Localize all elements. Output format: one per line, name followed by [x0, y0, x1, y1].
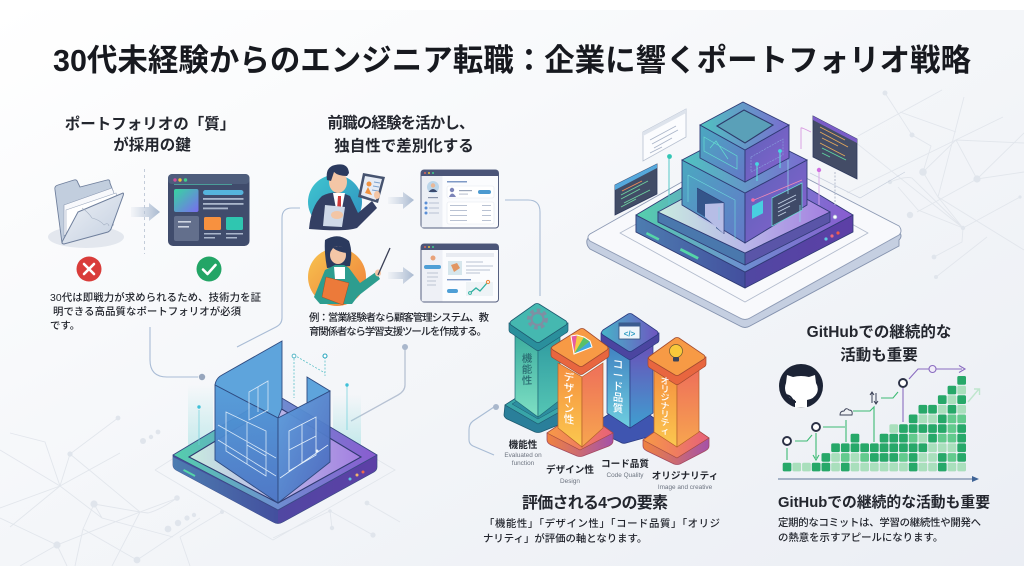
pillar: originality: リ [661, 408, 669, 420]
text: quality description [50, 291, 262, 332]
pillar labels: コード品質 [601, 458, 649, 470]
top cube [700, 125, 745, 182]
pillar labels: 機能性 [509, 439, 538, 451]
pillar: originality: テ [661, 417, 669, 429]
connectors with nodes [668, 157, 670, 205]
pillar: functionality [504, 304, 572, 432]
pillar labels: デザイン性 [546, 464, 594, 476]
heading: prior experience [328, 113, 474, 155]
pillar labels: Evaluated on [504, 452, 542, 459]
heading: prior experience: 独自性で差別化する [334, 136, 474, 155]
panel: GitHub activity [778, 323, 990, 544]
illustration: salesperson [308, 164, 385, 230]
panel: prior experience [308, 113, 498, 338]
panel: portfolio quality [48, 115, 262, 332]
pillar: originality: リ [661, 383, 669, 395]
base tier [636, 215, 853, 288]
floating code panel right [813, 116, 857, 179]
pillar: code quality: 品 [613, 391, 623, 405]
pillar: code quality: 質 [613, 401, 624, 416]
connectors: commit timeline [787, 366, 980, 460]
pillar: originality: ナ [661, 400, 669, 412]
pillar: code quality [597, 314, 659, 443]
pillar: design: ザ [564, 381, 575, 396]
text: quality description: です。 [50, 320, 80, 332]
text: example [309, 311, 490, 338]
title: 30代未経験からのエンジニア転職：企業に響くポートフォリオ戦略 [53, 43, 971, 78]
text: four elements description: ナリティ」が評価の軸となります。 [483, 532, 647, 545]
icon: code window: </> [624, 330, 636, 338]
text: example: 育関係者なら学習支援ツールを作成する。 [309, 325, 487, 338]
pillar: code quality: ー [613, 369, 623, 383]
pillar: code quality: ド [613, 380, 623, 394]
floating white panel [643, 109, 686, 161]
text: four elements description [483, 517, 720, 545]
icon: polished dashboard [168, 174, 250, 246]
text: GitHub description: 定期的なコミットは、学習の継続性や開発へ [778, 516, 981, 529]
pillar: originality: ィ [661, 425, 669, 437]
panel: four evaluation elements [483, 304, 720, 545]
illustration: blueprint on platform [173, 341, 377, 524]
pillar: code quality: コ [613, 358, 623, 372]
connector lines between sections [150, 200, 540, 455]
divider dashed line [144, 169, 146, 254]
illustration: teacher [308, 236, 390, 306]
pillar: originality: ジ [661, 392, 669, 404]
heading: quality [65, 115, 235, 154]
pillar: originality [643, 338, 709, 464]
second tier [658, 212, 830, 265]
text: quality description: 30代は即戦力が求められるため、技術力を証 [50, 291, 262, 304]
screen: learning support tool [421, 244, 498, 302]
icon: gear [529, 310, 546, 328]
screen: customer management app [421, 170, 498, 228]
icon: old folder [48, 180, 124, 248]
text: GitHub description [778, 516, 981, 544]
chart: commit grid [783, 376, 966, 471]
illustration: isometric portfolio tower [587, 102, 905, 328]
pillar: design: デ [564, 370, 575, 385]
heading: quality: ポートフォリオの「質」 [65, 115, 235, 133]
icon: cross mark [76, 256, 102, 282]
heading: quality: が採用の鍵 [113, 135, 191, 154]
heading: GitHub continuous activity: GitHubでの継続的な活動も重要 [778, 493, 990, 511]
pillar: functionality: 機 [522, 352, 533, 365]
pillar: design: 性 [564, 412, 575, 427]
axis arrow [778, 476, 979, 482]
pillar: functionality: 性 [522, 374, 533, 387]
arrow: teacher to app [388, 267, 414, 284]
icon: colour palette [571, 335, 592, 354]
text: four elements description: 「機能性」「デザイン性」「コード品質」「オリジ [484, 517, 720, 530]
text: quality description: 明できる高品質なポートフォリオが必須 [53, 305, 242, 318]
pillar: design: イ [564, 392, 574, 406]
heading: GitHub activity: GitHubでの継続的な [807, 323, 951, 341]
pillar: design [547, 328, 613, 456]
middle cube [682, 160, 745, 243]
text: GitHub description: の熱意を示すアピールになります。 [778, 531, 943, 544]
heading: GitHub activity [807, 323, 951, 364]
text: example: 例：営業経験者なら顧客管理システム、教 [309, 311, 490, 324]
back plate lines [810, 172, 905, 198]
pillar labels: オリジナリティ [652, 471, 718, 482]
white plate [587, 154, 901, 328]
arrow: salesperson to app [388, 192, 414, 209]
icons: activity nodes [783, 379, 907, 445]
icon: check mark [196, 256, 222, 282]
pillar labels [504, 439, 718, 491]
icon: GitHub logo [779, 364, 823, 408]
arrow: to quality [131, 203, 160, 221]
pillar labels: function [512, 460, 535, 467]
pillar: functionality: 能 [522, 363, 533, 376]
heading: GitHub activity: 活動も重要 [840, 346, 918, 364]
pillar labels: Code Quality [607, 472, 644, 479]
pillar labels: Image and creative [658, 484, 713, 491]
icon: light bulb [670, 344, 682, 362]
heading: four elements: 評価される4つの要素 [522, 494, 668, 512]
floating code panel left [615, 164, 657, 215]
pillar: design: ン [564, 402, 574, 417]
heading: prior experience: 前職の経験を活かし、 [328, 113, 474, 132]
pillar labels: Design [560, 478, 580, 485]
pillar: originality: オ [661, 375, 669, 387]
